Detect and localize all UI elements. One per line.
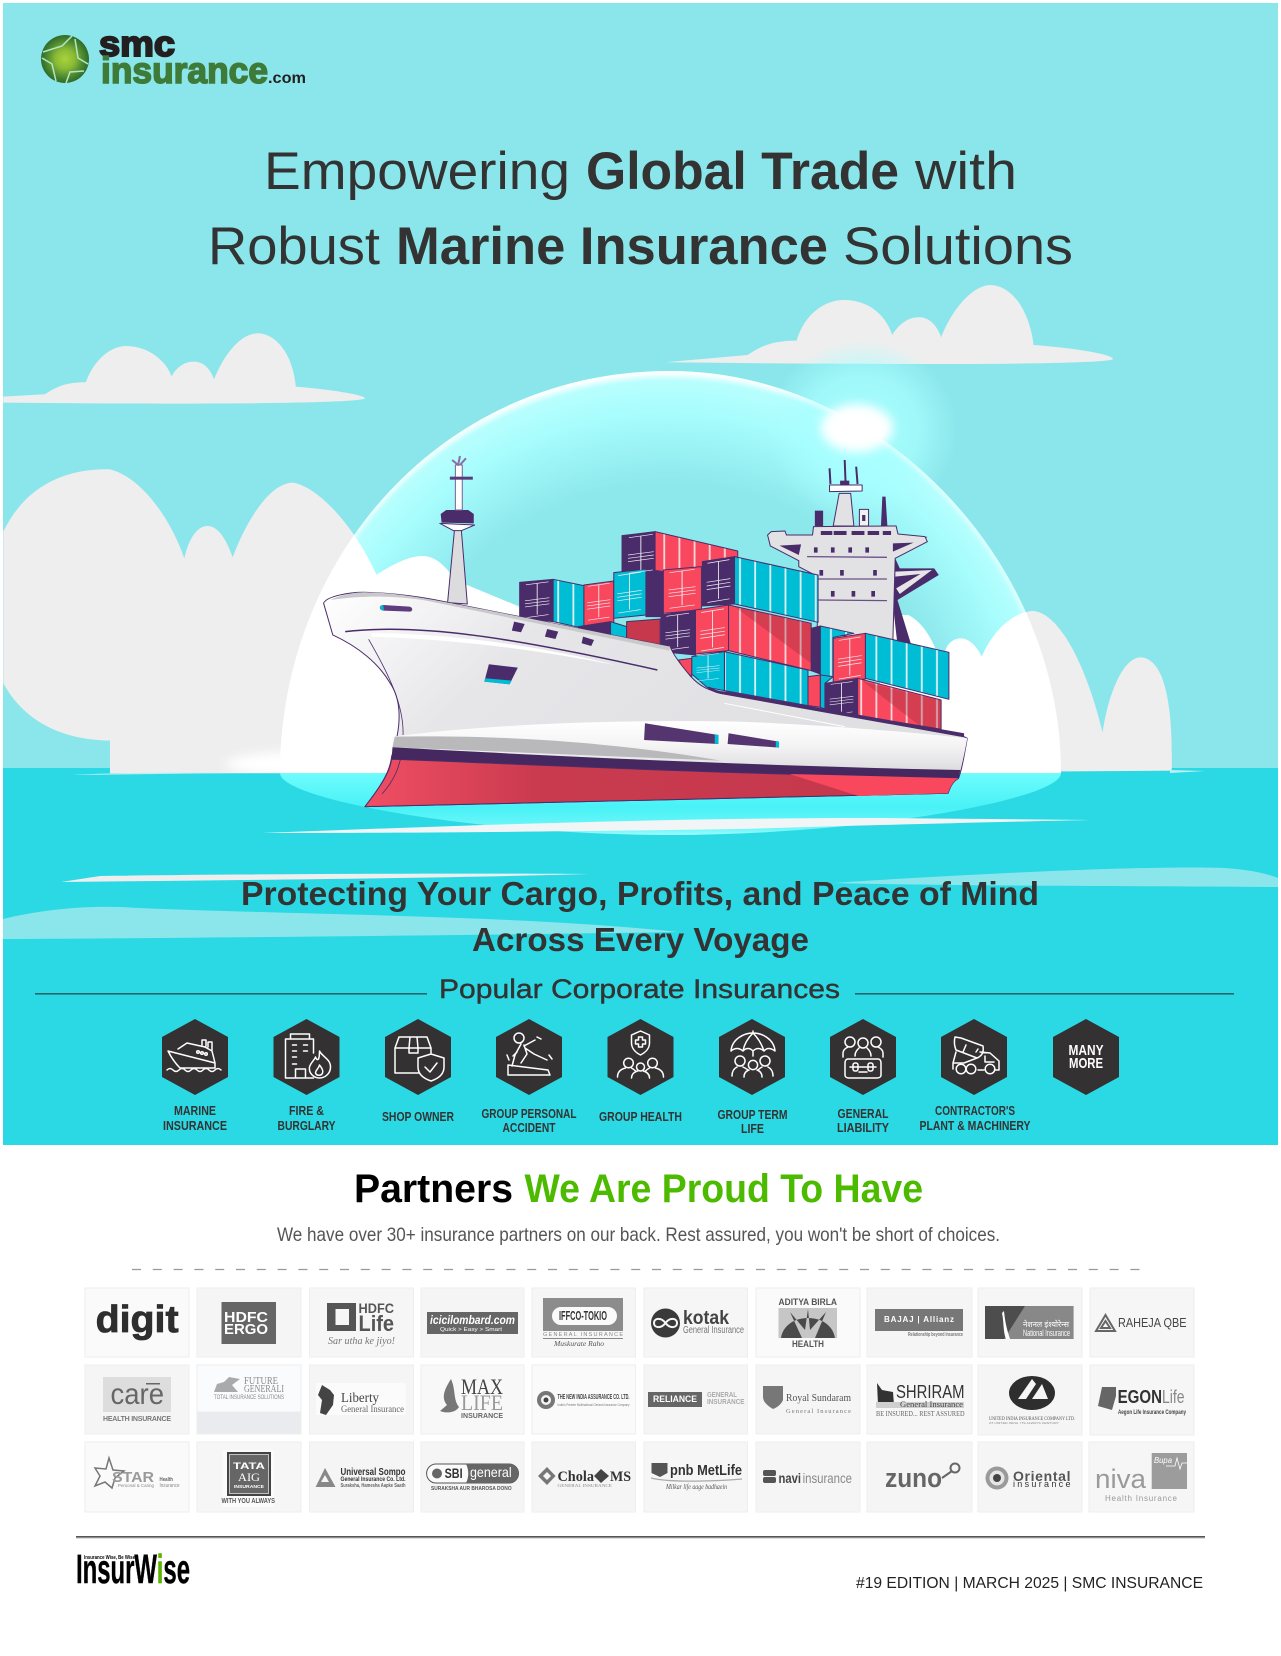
logo: Shriram General Insurance	[876, 1382, 964, 1418]
logo: Star Health: Insurance	[160, 1483, 180, 1489]
logo: HDFC Life: Sar utha ke jiyo!	[328, 1336, 395, 1347]
logo: Tata AIG: TATA	[233, 1461, 265, 1472]
logo: PNB MetLife: Milkar life aage badhaein	[665, 1483, 727, 1491]
logo: Chola MS: Chola	[558, 1469, 594, 1485]
logo: Tata AIG	[222, 1450, 275, 1507]
logo: The New India Assurance	[537, 1391, 630, 1409]
item: group personal accident	[482, 1019, 577, 1135]
logo: Max Life Insurance: MAX	[461, 1374, 503, 1399]
footer masthead: InsurWise: InsurWise	[76, 1546, 190, 1592]
white streak	[61, 874, 588, 882]
logo: Aditya Birla Health: HEALTH	[792, 1339, 824, 1349]
item: group term life: LIFE	[741, 1122, 764, 1136]
sun glare on dome	[767, 340, 957, 520]
logo: IFFCO-TOKIO: GENERAL INSURANCE	[543, 1332, 623, 1338]
logo: Universal Sompo: Universal Sompo	[340, 1467, 406, 1478]
dome body	[280, 371, 1061, 773]
logo: Star Health: STAR	[112, 1469, 154, 1486]
logo: Raheja QBE	[1096, 1315, 1187, 1331]
logo: Shriram General Insurance: SHRIRAM	[896, 1382, 964, 1402]
red antifouling hull	[365, 759, 959, 807]
water streak under ship	[262, 818, 1090, 833]
sea	[3, 768, 1278, 1145]
logo: National Insurance: नेशनल इंश्योरेन्स	[1023, 1319, 1070, 1329]
logo: Reliance General Insurance: GENERAL	[707, 1390, 737, 1399]
item: fire and burglary	[274, 1019, 340, 1133]
logo: digit: digit	[96, 1299, 179, 1341]
logo: United India Insurance: UNITED INDIA INSURANCE COMPANY LTD.	[989, 1416, 1075, 1422]
foremast	[440, 456, 475, 604]
logo word smc: smc	[99, 23, 175, 64]
logo: Aditya Birla Health: ADITYA BIRLA	[778, 1297, 837, 1308]
logo: Navi Insurance: insurance	[803, 1470, 852, 1486]
partner logo grid	[85, 1288, 1194, 1512]
logo: Star Health: Personal & Caring	[118, 1483, 154, 1488]
item: contractors plant and machinery: PLANT & MACHINERY	[920, 1119, 1031, 1133]
subheading	[241, 875, 1039, 958]
logo: HDFC Life: Life	[358, 1311, 394, 1336]
logo: ICICI Lombard	[427, 1312, 518, 1334]
logo: Future Generali: GENERALI	[244, 1384, 284, 1395]
logo: Care Health Insurance: HEALTH INSURANCE	[103, 1416, 171, 1423]
logo: Max Life Insurance: LIFE	[461, 1390, 503, 1415]
logo: Care Health Insurance	[103, 1377, 171, 1423]
footer rule	[76, 1536, 1205, 1538]
item: many more: MORE	[1069, 1055, 1103, 1072]
logo globe icon	[41, 35, 89, 83]
cloud: top right	[666, 285, 1113, 364]
item: fire and burglary: BURGLARY	[278, 1119, 336, 1133]
footer masthead: InsurWise: Insurance Wise, Be Wise	[84, 1555, 135, 1561]
item: general liability	[830, 1019, 896, 1135]
logo: Bajaj Allianz: Relationship beyond insurance	[908, 1332, 963, 1338]
wave left	[3, 907, 678, 939]
title: Solutions	[843, 217, 1073, 276]
logo: Navi Insurance	[763, 1470, 852, 1486]
logo: Bajaj Allianz	[875, 1309, 963, 1338]
item: many more: MANY	[1068, 1042, 1104, 1059]
small windows	[512, 622, 594, 646]
logo: Shriram General Insurance: General Insurance	[900, 1399, 963, 1409]
logo: Kotak	[651, 1308, 744, 1338]
logo: ICICI Lombard: icicilombard.com	[430, 1313, 515, 1327]
white clouds seen through dome	[233, 483, 1103, 773]
logo: Aditya Birla Health	[778, 1297, 837, 1349]
logo: Future Generali: TOTAL INSURANCE SOLUTIONS	[214, 1395, 284, 1401]
logo: National Insurance: National Insurance	[1023, 1328, 1070, 1338]
logo: SBI General	[427, 1464, 518, 1492]
logo: Liberty General Insurance: General Insurance	[341, 1404, 404, 1414]
logo: HDFC ERGO	[222, 1302, 276, 1344]
large window	[484, 664, 518, 684]
sky background panel	[3, 3, 1278, 1145]
logo: SBI General: general	[470, 1464, 512, 1480]
logo: National Insurance	[985, 1306, 1074, 1339]
partners heading	[354, 1167, 923, 1211]
logo: Raheja QBE: RAHEJA QBE	[1118, 1315, 1187, 1330]
logo: Aegon Life: Life	[1162, 1387, 1184, 1407]
logo: Universal Sompo	[316, 1467, 406, 1489]
logo: PNB MetLife	[651, 1462, 742, 1491]
logo: HDFC ERGO: ERGO	[224, 1322, 268, 1338]
logo: SBI General: SBI	[445, 1465, 463, 1481]
subheading: Across Every Voyage	[472, 921, 809, 958]
logo: Kotak: General Insurance	[683, 1325, 744, 1336]
subheading: Protecting Your Cargo, Profits, and Peace of Mind	[241, 875, 1039, 912]
logo: Oriental Insurance	[986, 1466, 1070, 1490]
logo word .com: .com	[268, 70, 306, 87]
stern windows	[644, 723, 779, 748]
section heading: popular corporate insurances: Popular Corporate Insurances	[439, 974, 840, 1004]
waterline stripe	[392, 747, 960, 778]
item: group term life	[718, 1019, 788, 1136]
logo: Oriental Insurance: Oriental	[1013, 1468, 1070, 1484]
sea waves	[3, 867, 1278, 939]
insurance types row	[162, 1019, 1119, 1136]
item: contractors plant and machinery	[920, 1019, 1031, 1133]
item: fire and burglary: FIRE &	[289, 1104, 324, 1118]
logo: Star Health	[95, 1458, 180, 1489]
item: general liability: GENERAL	[838, 1107, 889, 1121]
card backgrounds	[85, 1288, 1194, 1512]
logo: HDFC Life: HDFC	[358, 1300, 394, 1316]
stacked shipping containers	[520, 532, 949, 729]
logo: SBI General: SURAKSHA AUR BHAROSA DONO	[431, 1486, 512, 1492]
logo: HDFC Life	[327, 1300, 395, 1347]
logo: Star Health: Health	[160, 1477, 173, 1483]
title: Robust	[208, 217, 380, 276]
bridge superstructure	[768, 460, 939, 645]
item: contractors plant and machinery: CONTRACTOR'S	[935, 1104, 1015, 1118]
logo: Liberty General Insurance	[316, 1383, 406, 1415]
logo: Reliance General Insurance: INSURANCE	[707, 1397, 744, 1406]
logo: Kotak: kotak	[683, 1308, 729, 1329]
item: marine insurance	[162, 1019, 228, 1133]
partners description: We have over 30+ insurance partners on our back. Rest assured, you won't be short of choices.	[277, 1224, 1000, 1246]
logo: Shriram General Insurance: BE INSURED... REST ASSURED	[876, 1410, 964, 1418]
logo: Chola MS: MS	[610, 1469, 631, 1485]
logo: The New India Assurance: India's Premier Multinational General Insurance Company	[558, 1402, 630, 1407]
logo: Niva Bupa: Bupa	[1154, 1456, 1173, 1465]
logo: Bajaj Allianz: BAJAJ | Allianz	[884, 1315, 954, 1324]
horizon streaks beside clouds	[73, 770, 1205, 775]
item: group personal accident: GROUP PERSONAL	[482, 1107, 577, 1121]
logo: Max Life Insurance: INSURANCE	[461, 1413, 503, 1420]
title: Marine Insurance	[396, 217, 828, 276]
logo: The New India Assurance: THE NEW INDIA ASSURANCE CO. LTD.	[558, 1394, 630, 1401]
wave right	[833, 867, 1278, 887]
hull white sheer band	[392, 721, 967, 770]
item: marine insurance: MARINE	[174, 1104, 216, 1118]
item: general liability: LIABILITY	[837, 1121, 890, 1135]
item: many more	[1053, 1019, 1119, 1095]
title: with	[914, 142, 1017, 201]
logo: Royal Sundaram: General Insurance	[786, 1408, 851, 1415]
cloud: large left	[3, 469, 377, 773]
logo: IFFCO-TOKIO	[543, 1298, 623, 1348]
dome rim highlight	[354, 371, 1026, 614]
logo: United India Insurance	[989, 1376, 1075, 1425]
logo: Aegon Life: Aegon Life Insurance Company	[1118, 1410, 1187, 1416]
dome water base	[280, 773, 1061, 835]
logo: Chola MS: GENERAL INSURANCE	[558, 1483, 612, 1488]
logo: Care Health Insurance: care	[110, 1378, 164, 1411]
logo: Aegon Life: EGON	[1118, 1387, 1162, 1407]
fog glare left	[230, 752, 280, 773]
logo: Royal Sundaram: Royal Sundaram	[786, 1393, 851, 1404]
container ship	[324, 456, 967, 807]
logo: Chola MS	[538, 1467, 631, 1488]
logo: Future Generali: FUTURE	[244, 1376, 278, 1387]
logo: Royal Sundaram	[763, 1386, 851, 1415]
logo: Navi Insurance: navi	[778, 1470, 801, 1486]
logo: PNB MetLife: pnb MetLife	[670, 1462, 742, 1479]
partners heading: We Are Proud To Have	[524, 1167, 923, 1211]
logo: Tata AIG: WITH YOU ALWAYS	[222, 1498, 275, 1505]
logo: Tata AIG: AIG	[238, 1470, 260, 1484]
logo: HDFC ERGO: HDFC	[224, 1310, 269, 1326]
sun highlight	[821, 404, 893, 452]
item: shop owner	[382, 1019, 454, 1124]
logo: Reliance General Insurance: RELIANCE	[653, 1394, 697, 1404]
logo: Future Generali	[214, 1376, 284, 1401]
logo: Niva Bupa: Health Insurance	[1105, 1494, 1178, 1503]
logo: United India Insurance: AT UNITED INDIA, ITS ALWAYS CENTURY	[989, 1421, 1059, 1425]
logo: Universal Sompo: Suraksha, Hamesha Aapke Saath	[340, 1483, 406, 1489]
logo: Niva Bupa	[1095, 1453, 1187, 1503]
glass dome protecting the ship	[225, 340, 1103, 835]
title: Global Trade	[586, 142, 899, 201]
title	[208, 142, 1073, 276]
logo: Tata AIG: INSURANCE	[234, 1484, 264, 1489]
hull	[324, 592, 967, 807]
logo: Niva Bupa: niva	[1095, 1464, 1147, 1494]
logo word insurance: insurance	[101, 50, 268, 91]
cloud: large right	[980, 611, 1172, 772]
item: group personal accident: ACCIDENT	[502, 1121, 556, 1135]
logo: Reliance General Insurance	[648, 1390, 744, 1407]
logo: Aegon Life	[1098, 1387, 1187, 1416]
logo: smc insurance	[41, 23, 306, 91]
partners heading: Partners	[354, 1167, 513, 1211]
item: shop owner: SHOP OWNER	[382, 1110, 454, 1124]
logo: IFFCO-TOKIO: IFFCO-TOKIO	[559, 1308, 607, 1323]
logo: Max Life Insurance	[440, 1374, 503, 1420]
porthole bow	[380, 605, 412, 612]
logo: Universal Sompo: General Insurance Co. Ltd.	[340, 1476, 406, 1483]
cloud: top left	[3, 333, 365, 404]
item: group health: GROUP HEALTH	[599, 1110, 682, 1124]
item: group term life: GROUP TERM	[718, 1108, 788, 1122]
logo: ICICI Lombard: Quick > Easy > Smart	[440, 1327, 503, 1333]
logo: Liberty General Insurance: Liberty	[341, 1391, 379, 1406]
logo: IFFCO-TOKIO: Muskurate Raho	[553, 1340, 605, 1348]
logo: Oriental Insurance: insurance	[1013, 1479, 1070, 1489]
title: Empowering	[264, 142, 570, 201]
logo: Zuno: zuno	[885, 1463, 942, 1493]
footer edition text: #19 EDITION | MARCH 2025 | SMC INSURANCE	[856, 1575, 1203, 1592]
item: marine insurance: INSURANCE	[163, 1119, 227, 1133]
item: group health	[599, 1019, 682, 1124]
